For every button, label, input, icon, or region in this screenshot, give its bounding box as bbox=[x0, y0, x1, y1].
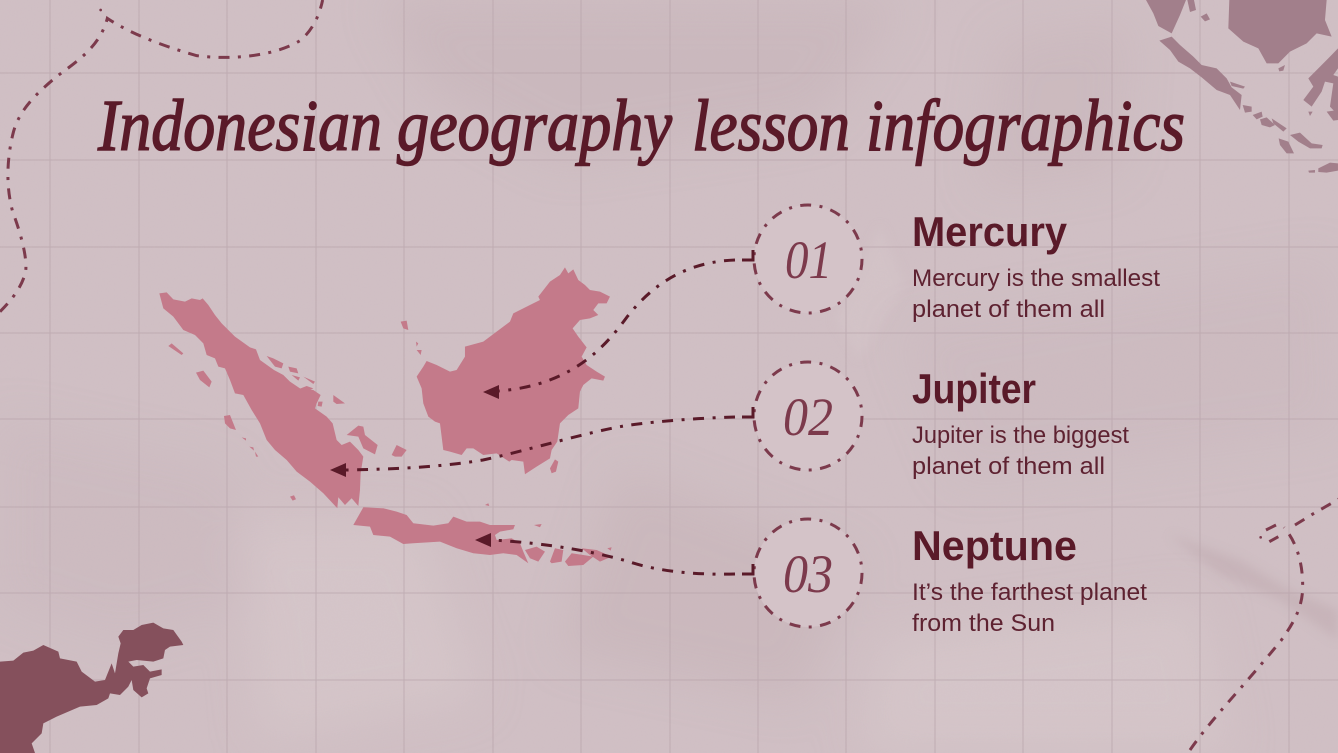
island: Sumatra bbox=[159, 292, 363, 508]
dashed route: bottom right bbox=[1190, 498, 1338, 750]
circle 02 bbox=[754, 362, 862, 470]
island: Java and neighbours bbox=[353, 507, 528, 563]
text block: Neptune bbox=[912, 522, 1147, 637]
text block: Mercury: Mercury bbox=[912, 208, 1068, 255]
circle 01 bbox=[754, 205, 862, 313]
title: infographics bbox=[866, 85, 1185, 166]
text block: Jupiter: Jupiter bbox=[912, 365, 1036, 412]
circle 03: 03 bbox=[783, 544, 833, 604]
text block: Mercury: planet of them all bbox=[912, 296, 1105, 323]
text block: Jupiter: Jupiter is the biggest bbox=[912, 422, 1129, 449]
island: Borneo bbox=[417, 267, 610, 474]
text block: Mercury: Mercury is the smallest bbox=[912, 265, 1160, 292]
circle 02: 02 bbox=[783, 387, 833, 447]
title: geography bbox=[397, 85, 673, 166]
title bbox=[97, 85, 1185, 166]
arrow 01 to Borneo bbox=[483, 250, 753, 399]
title: Indonesian bbox=[97, 85, 382, 166]
decorative map: bottom left landmass bbox=[0, 623, 183, 753]
small islands bbox=[168, 321, 612, 566]
circle 03 bbox=[754, 519, 862, 627]
text block: Neptune: It’s the farthest planet bbox=[912, 579, 1147, 606]
text block: Mercury bbox=[912, 208, 1160, 323]
text block: Jupiter bbox=[912, 365, 1129, 480]
dashed route: top left bbox=[0, 0, 323, 312]
title: lesson bbox=[692, 85, 850, 166]
text block: Neptune: Neptune bbox=[912, 522, 1077, 569]
map: Indonesia bbox=[159, 267, 612, 566]
arrow 03 to Java bbox=[475, 533, 753, 574]
text block: Neptune: from the Sun bbox=[912, 610, 1055, 637]
circle 01: 01 bbox=[785, 230, 832, 290]
text block: Jupiter: planet of them all bbox=[912, 453, 1105, 480]
decorative map: Southeast Asia top right bbox=[1146, 0, 1338, 173]
arrow 02 to Sumatra bbox=[330, 407, 753, 477]
